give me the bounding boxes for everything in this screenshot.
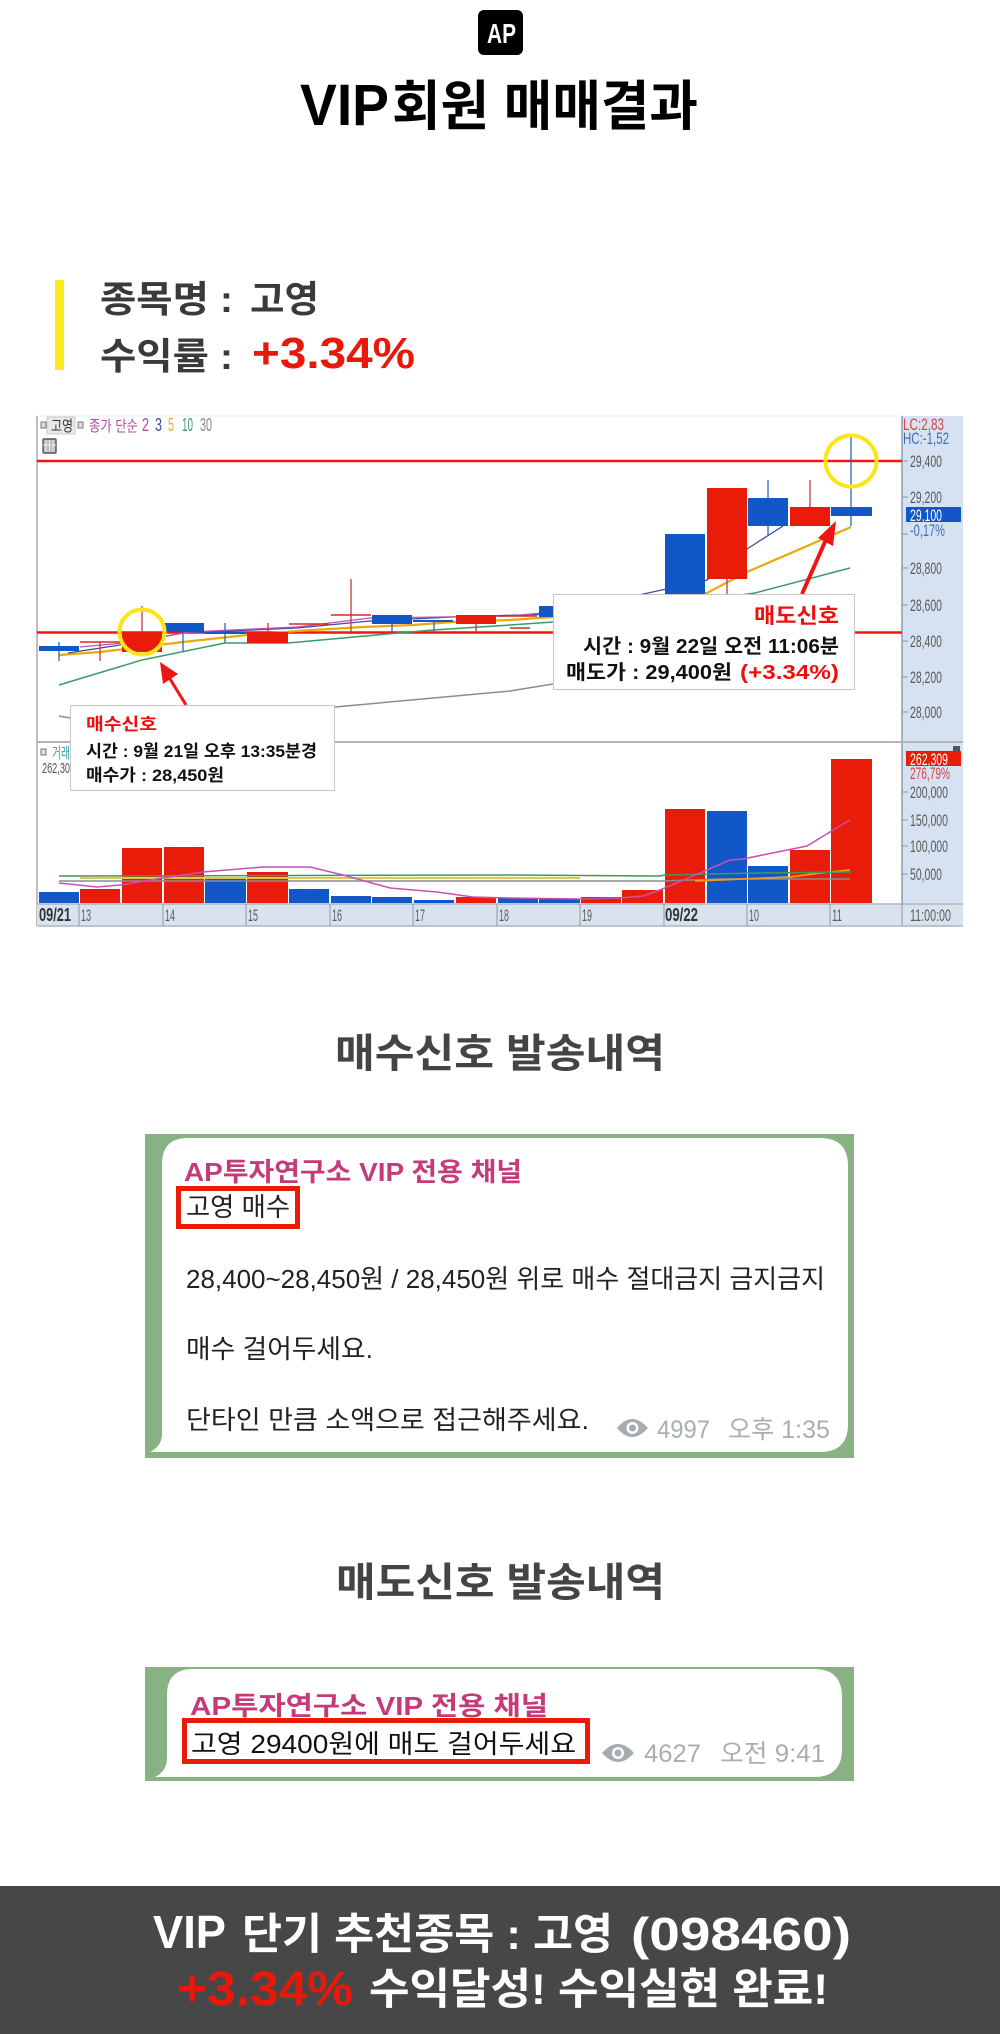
candlesticks <box>39 435 872 661</box>
panel: buy message: 28,400~28,450원 / 28,450원 위로 매수 절대금지 금지금지 <box>186 1264 825 1294</box>
price axis: 28,000 <box>910 703 942 722</box>
time axis: 11:00:00 <box>910 906 951 925</box>
footer banner: 수익달성! 수익실현 완료! <box>369 1966 828 2014</box>
volume label: 거래 <box>52 745 70 762</box>
callout: buy signal: 시간 : 9월 21일 오후 13:35분경 <box>86 742 317 761</box>
time axis <box>37 904 963 926</box>
time axis: 11 <box>832 906 842 925</box>
callout: sell signal: (+3.34%) <box>740 662 839 684</box>
footer banner: VIP <box>153 1906 226 1958</box>
price axis: LC:2,83 <box>903 415 944 434</box>
title <box>300 73 698 138</box>
price axis: 200,000 <box>910 783 948 802</box>
volume moving averages <box>59 820 851 899</box>
stock summary: +3.34% <box>252 329 415 378</box>
price axis: -0,17% <box>910 521 945 540</box>
time axis: 14 <box>165 906 175 925</box>
panel: buy message: 4997 <box>657 1416 710 1444</box>
chart legend: 고영 <box>51 418 73 435</box>
callout: sell signal: 매도가 : 29,400원 <box>566 661 732 684</box>
volume label <box>41 745 70 777</box>
time axis: 18 <box>499 906 509 925</box>
panel: sell message: 고영 29400원에 매도 걸어두세요 <box>191 1729 576 1759</box>
panel: sell message: AP투자연구소 VIP 전용 채널 <box>190 1691 548 1721</box>
target price lines <box>37 461 902 632</box>
stock summary <box>55 279 415 378</box>
sell signal arrow <box>802 521 836 594</box>
logo: AP: AP <box>487 18 516 49</box>
callout: buy signal: 매수신호 <box>86 715 157 734</box>
price axis: 50,000 <box>910 865 942 884</box>
panel: stock chart <box>37 415 963 926</box>
price axis: HC:-1,52 <box>903 429 949 448</box>
time axis: 16 <box>332 906 342 925</box>
sell signal circle <box>826 436 876 486</box>
chart legend: 5 <box>168 415 174 435</box>
chart legend <box>41 415 212 453</box>
footer banner: +3.34% <box>177 1963 353 2016</box>
buy signal circle <box>120 610 164 654</box>
price axis <box>902 415 961 884</box>
footer banner: (098460) <box>631 1908 851 1960</box>
price axis: 29,400 <box>910 452 942 471</box>
price axis: 29,100 <box>910 506 942 525</box>
time axis: 09/21 <box>39 905 71 925</box>
time axis: 09/22 <box>665 905 698 925</box>
title: 회원 매매결과 <box>392 77 698 137</box>
panel: buy message: 매수 걸어두세요. <box>186 1334 373 1364</box>
time axis: 10 <box>749 906 759 925</box>
time axis: 19 <box>582 906 592 925</box>
price axis: 28,400 <box>910 632 942 651</box>
price axis: 100,000 <box>910 837 948 856</box>
time axis: 13 <box>81 906 91 925</box>
stock summary: 종목명 : <box>100 279 233 320</box>
panel: sell message <box>145 1667 854 1781</box>
stock summary: 수익률 : <box>100 336 233 377</box>
heading: sell signal history: 매도신호 발송내역 <box>336 1561 665 1605</box>
price axis: 262,309 <box>910 750 948 769</box>
buy signal arrow <box>160 662 186 705</box>
heading: buy signal history: 매수신호 발송내역 <box>335 1032 665 1076</box>
icon: views eye <box>617 1419 648 1437</box>
panel: buy message: 오후 1:35 <box>728 1416 830 1444</box>
price axis: 28,600 <box>910 596 942 615</box>
chart legend: 3 <box>155 415 162 435</box>
callout: buy signal: 매수가 : 28,450원 <box>86 766 224 785</box>
panel: buy message: 고영 매수 <box>186 1192 290 1222</box>
footer banner <box>0 1886 1000 2034</box>
stock summary: 고영 <box>250 279 319 320</box>
panel: buy message: AP투자연구소 VIP 전용 채널 <box>184 1157 522 1187</box>
panel: buy message <box>145 1134 854 1458</box>
callout: sell signal <box>554 594 854 690</box>
panel: sell message: 오전 9:41 <box>720 1740 825 1768</box>
chart legend: 30 <box>200 415 212 435</box>
icon: views eye <box>602 1744 634 1762</box>
chart legend: 10 <box>182 415 193 435</box>
panel: sell message: 4627 <box>644 1740 701 1768</box>
time axis: 15 <box>248 906 258 925</box>
moving average lines <box>59 526 851 718</box>
footer banner: 단기 추천종목 : 고영 <box>242 1911 613 1959</box>
volume label: 262,30 <box>42 760 70 777</box>
price axis: 28,200 <box>910 668 942 687</box>
callout: sell signal: 시간 : 9월 22일 오전 11:06분 <box>583 635 839 658</box>
panel: buy message: 단타인 만큼 소액으로 접근해주세요. <box>186 1405 589 1435</box>
volume bars <box>39 759 872 903</box>
callout: buy signal <box>70 706 334 790</box>
price axis: 28,800 <box>910 559 942 578</box>
chart legend: 종가 단순 <box>89 418 138 435</box>
chart legend: 2 <box>142 415 149 435</box>
price axis: 276,79% <box>910 764 950 783</box>
time axis: 17 <box>415 906 425 925</box>
title: VIP <box>300 73 389 138</box>
logo: AP <box>478 10 523 55</box>
price axis: 150,000 <box>910 811 948 830</box>
price axis: 29,200 <box>910 488 942 507</box>
callout: sell signal: 매도신호 <box>754 605 839 628</box>
